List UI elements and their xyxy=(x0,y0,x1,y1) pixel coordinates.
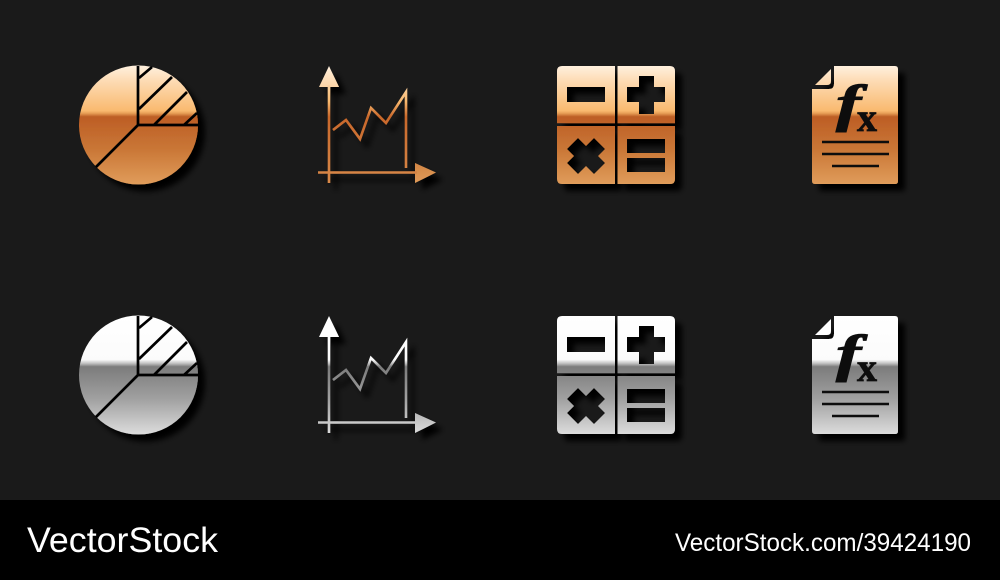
icon: silver line chart xyxy=(318,316,436,433)
formula text xyxy=(836,325,877,390)
icon: gold line chart xyxy=(318,66,436,183)
formula text: x xyxy=(857,95,877,140)
icon: gold formula document xyxy=(812,66,898,184)
formula text: f xyxy=(836,325,867,383)
icon: silver calculator xyxy=(557,316,675,434)
icon: gold pie chart xyxy=(79,66,198,184)
icon: silver pie chart xyxy=(79,316,198,434)
icon: silver formula document xyxy=(812,316,898,434)
icon: gold calculator xyxy=(557,66,675,184)
footer brand: VectorStock xyxy=(27,521,219,560)
formula text: x xyxy=(857,345,877,390)
footer bar xyxy=(0,500,1000,580)
footer image id: VectorStock.com/39424190 xyxy=(675,529,971,557)
formula text xyxy=(836,75,877,140)
formula text: f xyxy=(836,75,867,133)
